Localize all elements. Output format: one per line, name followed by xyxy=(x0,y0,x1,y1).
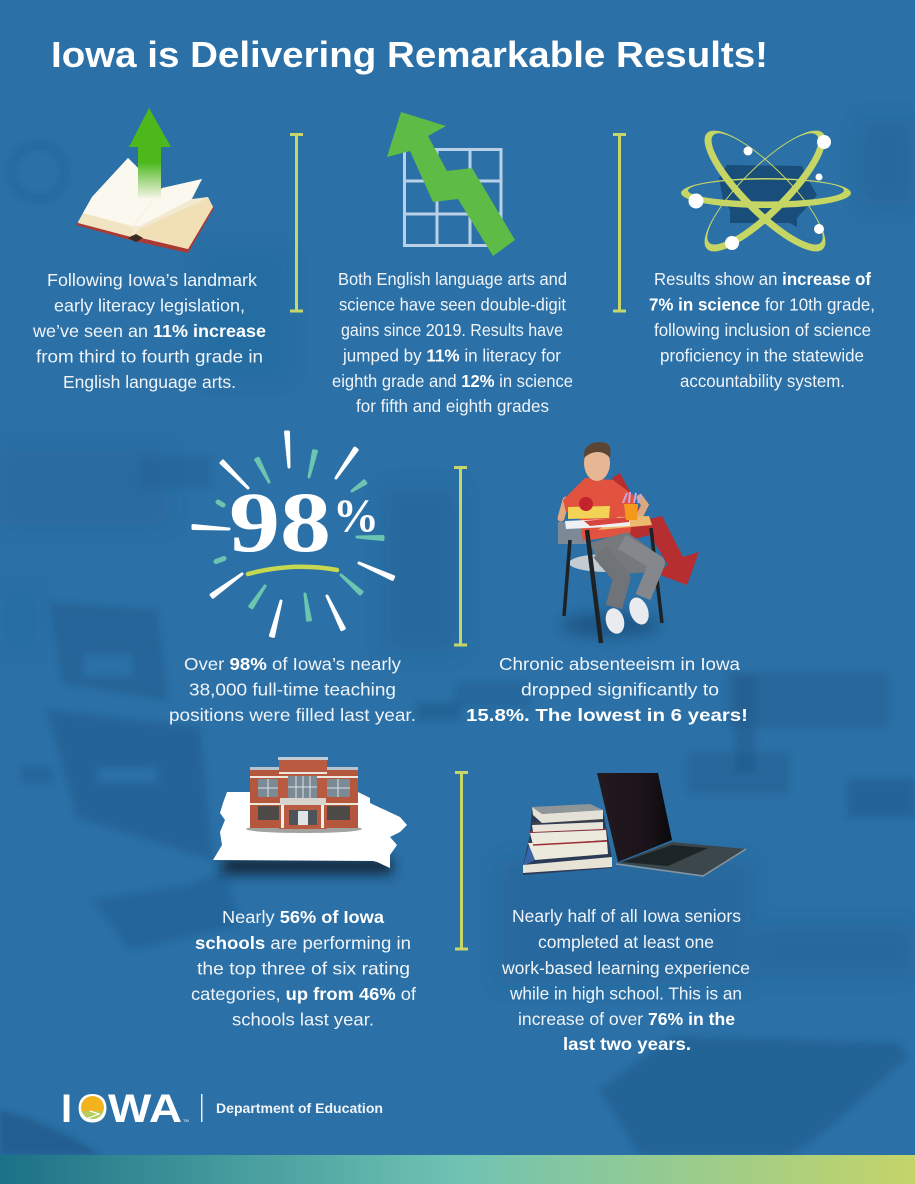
text: teachers: positions were filled last year. xyxy=(169,705,416,725)
text: work-based learning: increase of over 76% in the xyxy=(518,1009,735,1029)
text: teachers: 38,000 full-time teaching xyxy=(189,680,396,700)
panel: chronic absenteeism xyxy=(466,442,748,725)
text: ratings: schools are performing in xyxy=(195,933,411,953)
logo: Iowa Department of Education: O xyxy=(77,1087,108,1131)
text: work-based learning xyxy=(501,906,750,1054)
text: literacy xyxy=(32,270,266,392)
panel: work-based learning xyxy=(501,773,750,1054)
icon: open book with green arrow xyxy=(76,108,214,253)
footer gradient bar xyxy=(0,1155,915,1184)
text: science xyxy=(649,269,875,391)
text: work-based learning: completed at least one xyxy=(538,932,714,952)
logo: Iowa Department of Education xyxy=(61,1087,383,1131)
icon: atom around Iowa xyxy=(681,116,851,266)
text: literacy: Following Iowa’s landmark xyxy=(47,270,257,290)
text: ratings: Nearly 56% of Iowa xyxy=(222,907,384,927)
text: ratings: the top three of six rating xyxy=(197,958,410,978)
icon: grid with green arrow xyxy=(387,112,515,256)
text: literacy: from third to fourth grade in xyxy=(36,346,263,366)
icon: boy at desk with red arrow xyxy=(558,442,699,643)
text: gains: science have seen double-digit xyxy=(339,294,566,314)
logo: Iowa Department of Education: I xyxy=(61,1087,72,1131)
panel: school ratings xyxy=(191,757,416,1030)
title: Iowa is Delivering Remarkable Results! xyxy=(51,34,768,75)
text: work-based learning: last two years. xyxy=(563,1034,691,1054)
divider: row 1 right xyxy=(613,134,626,311)
text: absenteeism: 15.8%. The lowest in 6 years! xyxy=(466,705,748,725)
panel: teaching positions xyxy=(169,432,416,725)
logo: Iowa Department of Education: TM xyxy=(183,1118,189,1123)
text: literacy: early literacy legislation, xyxy=(54,296,245,316)
icon: 98% burst xyxy=(193,432,394,636)
text: gains: Both English language arts and xyxy=(338,269,567,289)
text: gains xyxy=(332,269,573,416)
text: ratings: categories, up from 46% of xyxy=(191,984,416,1004)
text: science: accountability system. xyxy=(680,371,845,391)
text: teachers: Over 98% of Iowa’s nearly xyxy=(184,654,401,674)
icon: 98% burst: 98 xyxy=(229,474,331,570)
text: absenteeism: dropped significantly to xyxy=(521,680,719,700)
text: ratings: schools last year. xyxy=(232,1010,374,1030)
panel: science increase xyxy=(649,116,875,391)
text: work-based learning: Nearly half of all Iowa seniors xyxy=(512,906,741,926)
text: science: Results show an increase of xyxy=(654,269,871,289)
icon: 98% burst: % xyxy=(333,490,379,542)
text: work-based learning: work-based learning experience xyxy=(501,958,750,978)
text: science: 7% in science for 10th grade, xyxy=(649,294,875,314)
panel: third to fourth grade literacy xyxy=(32,108,266,392)
text: literacy: we’ve seen an 11% increase xyxy=(32,321,266,341)
text: ratings xyxy=(191,907,416,1030)
text: literacy: English language arts. xyxy=(63,372,236,392)
text: gains: eighth grade and 12% in science xyxy=(332,371,573,391)
divider: row 1 left xyxy=(290,134,303,311)
text: gains: for fifth and eighth grades xyxy=(356,396,549,416)
text: science: following inclusion of science xyxy=(654,320,871,340)
text: gains: jumped by 11% in literacy for xyxy=(342,346,561,366)
text: teachers xyxy=(169,654,416,725)
icon: books and laptop xyxy=(523,773,746,876)
text: absenteeism: Chronic absenteeism in Iowa xyxy=(499,654,740,674)
text: science: proficiency in the statewide xyxy=(660,346,864,366)
panel: double-digit gains xyxy=(332,112,573,416)
divider: row 2 xyxy=(454,468,467,645)
logo: Iowa Department of Education: Department of Education xyxy=(216,1101,383,1116)
logo: Iowa Department of Education: WA xyxy=(108,1087,182,1131)
text: work-based learning: while in high school. This is an xyxy=(509,984,742,1004)
divider: row 3 xyxy=(455,772,468,949)
icon: school on Iowa map xyxy=(213,757,407,874)
text: gains: gains since 2019. Results have xyxy=(341,320,563,340)
text: absenteeism xyxy=(466,654,748,725)
